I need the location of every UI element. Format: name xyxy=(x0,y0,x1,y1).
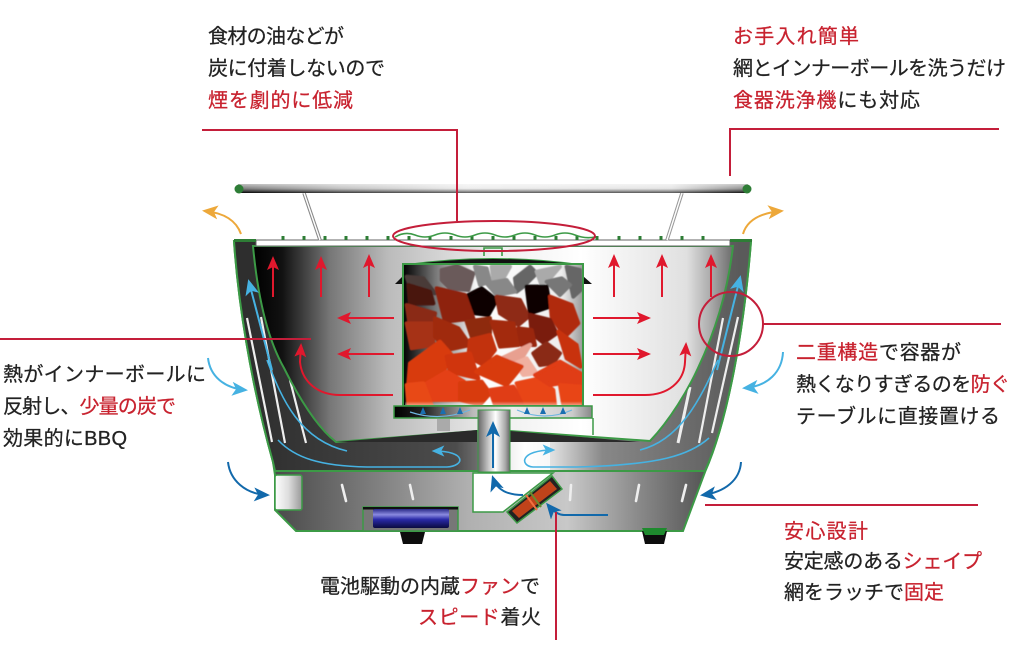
right skirt under ledge xyxy=(592,418,594,435)
text block: battery fan: 電池駆動の内蔵ファンで xyxy=(320,575,540,598)
text block: heat reflection: 熱がインナーボールに xyxy=(3,363,206,386)
text block: double structure: テーブルに直接置ける xyxy=(796,404,1000,428)
callout line: smoke xyxy=(202,130,595,251)
side air intake tube xyxy=(275,475,302,510)
text block: heat reflection: 効果的にBBQ xyxy=(3,427,127,450)
text block: safety design: 安定感のあるシェイプ xyxy=(784,550,982,573)
grill body xyxy=(234,241,751,531)
latch xyxy=(484,248,502,256)
coals xyxy=(405,266,582,406)
air flow arrows (light blue) xyxy=(208,278,783,467)
grill net and rim xyxy=(234,184,752,256)
callout line: easy care xyxy=(730,129,999,176)
text block: double structure: 二重構造で容器が xyxy=(796,341,961,364)
outer shell xyxy=(234,241,751,531)
text block: heat reflection xyxy=(3,363,206,450)
text block: battery fan xyxy=(320,575,541,629)
heat arrows (red) xyxy=(273,256,711,395)
exhaust arrows (orange) xyxy=(205,211,781,234)
wavy net xyxy=(395,233,595,238)
text block: safety design: 網をラッチで固定 xyxy=(784,581,944,604)
rim xyxy=(256,240,730,246)
centre tube xyxy=(478,410,510,472)
net supports xyxy=(304,193,320,240)
text block: easy maintenance: 食器洗浄機にも対応 xyxy=(733,89,920,112)
white duct xyxy=(510,442,550,470)
feet xyxy=(400,528,667,544)
text block: easy maintenance xyxy=(733,25,1006,112)
lower slots xyxy=(342,485,686,501)
text block: double structure: 熱くなりすぎるのを防ぐ xyxy=(796,373,1010,396)
case frame xyxy=(403,264,583,406)
inner bowl xyxy=(253,246,733,442)
net ticks xyxy=(283,236,703,240)
fan duct xyxy=(473,410,562,523)
callout line: fan xyxy=(555,512,557,640)
ledge xyxy=(394,406,592,418)
callout line: double wall xyxy=(699,292,1001,356)
text block: smoke reduction: 煙を劇的に低減 xyxy=(208,89,353,112)
text block: easy maintenance: お手入れ簡単 xyxy=(733,25,859,48)
text block: heat reflection: 反射し、少量の炭で xyxy=(3,395,176,418)
fan xyxy=(507,476,562,523)
text block: easy maintenance: 網とインナーボールを洗うだけ xyxy=(733,57,1006,80)
dark under-wedge xyxy=(336,430,477,442)
text block: double structure xyxy=(796,341,1010,428)
duct box xyxy=(473,473,553,512)
fan nozzle arcs xyxy=(410,407,572,417)
text block: smoke reduction: 食材の油などが xyxy=(208,25,344,48)
case lid xyxy=(403,258,583,268)
wall streaks xyxy=(247,317,738,443)
support post xyxy=(437,419,450,431)
double wall space xyxy=(234,241,751,471)
text block: smoke reduction xyxy=(208,25,385,112)
text block: battery fan: スピード着火 xyxy=(418,606,541,629)
air flow arrows (dark blue) xyxy=(228,424,741,515)
battery xyxy=(363,507,458,531)
case back xyxy=(403,264,583,406)
callout line: stability xyxy=(705,504,978,506)
charcoal case xyxy=(394,258,593,435)
text block: safety design xyxy=(784,520,982,604)
text block: safety design: 安心設計 xyxy=(784,520,868,543)
text block: smoke reduction: 炭に付着しないので xyxy=(208,57,385,80)
callout line: reflect xyxy=(0,338,311,340)
top rod xyxy=(238,184,748,193)
